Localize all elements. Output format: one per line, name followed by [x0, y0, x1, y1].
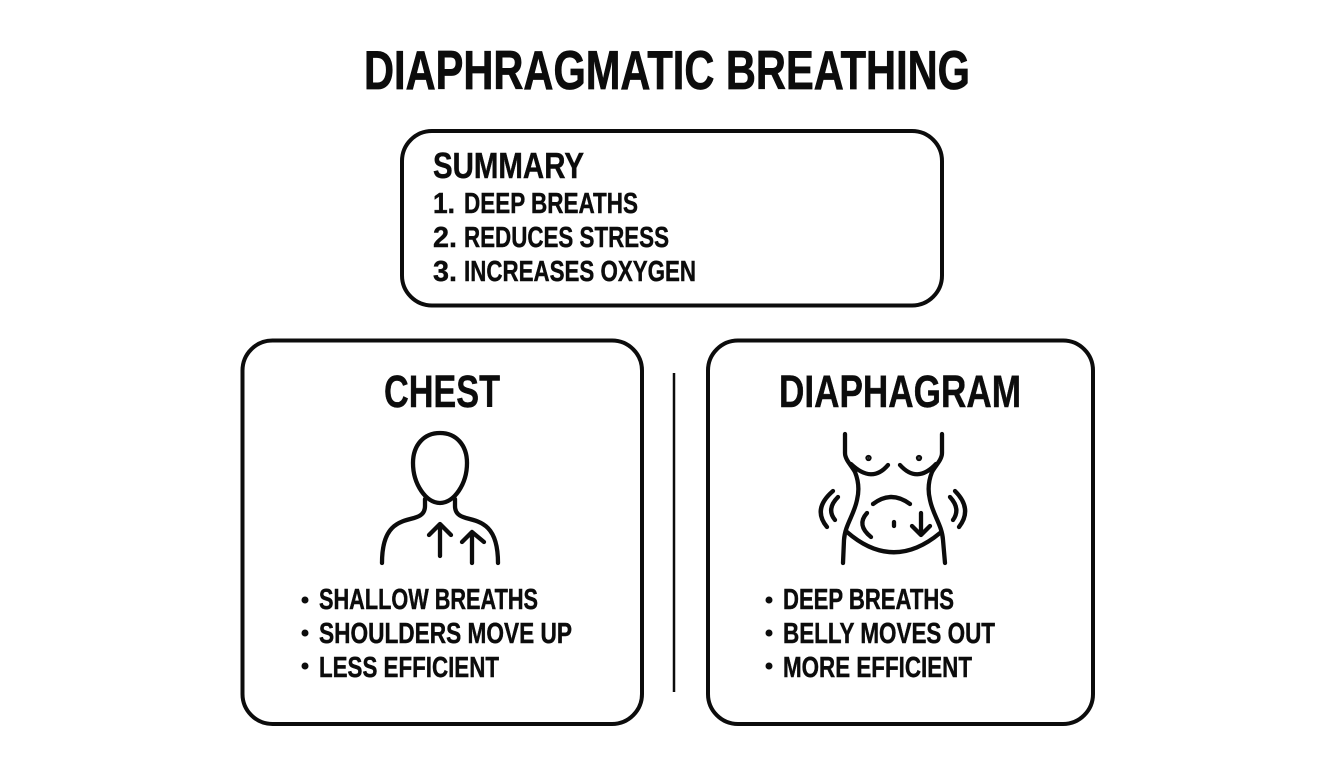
- chest bullet list: SHOULDERS MOVE UP: [319, 618, 572, 650]
- chest bullet list: SHALLOW BREATHS: [319, 584, 538, 616]
- summary item 1: [433, 188, 638, 220]
- chest bullet list: [302, 584, 572, 684]
- title: DIAPHRAGMATIC BREATHING: [364, 39, 970, 101]
- icon: person with upward arrows: [382, 433, 498, 563]
- chest bullet list: LESS EFFICIENT: [319, 652, 499, 684]
- summary item 1: DEEP BREATHS: [464, 188, 638, 220]
- chest heading: CHEST: [384, 366, 500, 417]
- summary item 2: REDUCES STRESS: [464, 222, 669, 254]
- summary heading: SUMMARY: [433, 145, 584, 186]
- panel: chest: [242, 340, 642, 724]
- summary item 2: 2.: [433, 222, 457, 254]
- diaphragm bullet list: BELLY MOVES OUT: [783, 618, 995, 650]
- diaphragm heading: DIAPHAGRAM: [779, 366, 1021, 417]
- panel: summary: [402, 131, 942, 306]
- center divider: [673, 373, 675, 692]
- diaphragm bullet list: MORE EFFICIENT: [783, 652, 972, 684]
- summary item 1: 1.: [433, 188, 455, 220]
- diaphragm bullet list: [766, 584, 995, 684]
- icon: torso with belly expanding: [821, 434, 965, 563]
- summary item 3: [433, 256, 696, 288]
- summary item 3: INCREASES OXYGEN: [464, 256, 696, 288]
- diaphragm bullet list: DEEP BREATHS: [783, 584, 954, 616]
- summary item 2: [433, 222, 669, 254]
- panel: diaphragm: [708, 340, 1093, 724]
- summary item 3: 3.: [433, 256, 457, 288]
